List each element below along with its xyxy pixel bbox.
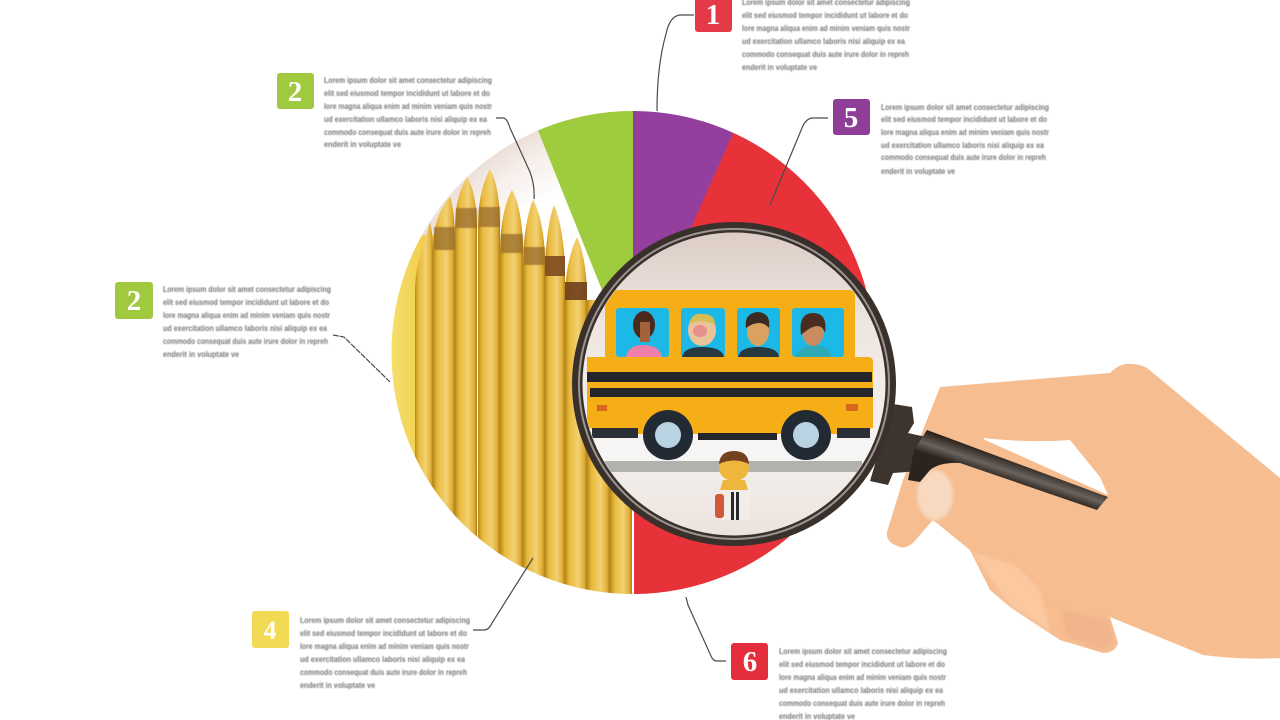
text 6: elit sed eiusmod tempor incididunt ut labore et do — [779, 659, 945, 669]
leader line: callout 4 — [473, 558, 533, 630]
text 4: elit sed eiusmod tempor incididunt ut labore et do — [300, 628, 467, 638]
leader line: callout 6 — [686, 597, 726, 661]
text 6 — [779, 646, 947, 720]
pie background — [391, 111, 633, 595]
text 5: lore magna aliqua enim ad minim veniam quis nostr — [881, 127, 1050, 137]
text 4 — [300, 615, 470, 690]
purple slice — [633, 111, 734, 258]
callout 4 — [252, 611, 470, 690]
pie chart — [391, 105, 890, 600]
text 2 left: Lorem ipsum dolor sit amet consectetur adipiscing — [163, 284, 331, 294]
text 5: Lorem ipsum dolor sit amet consectetur adipiscing — [881, 102, 1049, 112]
yellow slice — [392, 235, 441, 499]
text 4: lore magna aliqua enim ad minim veniam quis nostr — [300, 641, 470, 651]
text 5 — [881, 102, 1050, 176]
text 4: enderit in voluptate ve — [300, 680, 375, 690]
bumpers — [592, 428, 638, 438]
badge 5 — [833, 99, 870, 135]
text 4: ud exercitation ullamco laboris nisi aliquip ex ea — [300, 654, 465, 664]
gap between fingers — [983, 438, 1108, 495]
thumbnail — [917, 470, 953, 520]
badge 4: 4 — [264, 616, 276, 645]
passenger 1 — [626, 311, 662, 357]
text 2 left: elit sed eiusmod tempor incididunt ut labore et do — [163, 297, 329, 307]
lens rim — [572, 222, 896, 546]
text 5: commodo consequat duis aute irure dolor in repreh — [881, 152, 1046, 162]
badge 1 — [695, 0, 732, 32]
wheels — [643, 410, 693, 460]
passenger 2 — [682, 314, 724, 357]
lens glass — [582, 232, 886, 536]
lens scene — [580, 290, 890, 520]
road — [580, 440, 890, 461]
badge 6 — [731, 643, 768, 680]
hand — [887, 364, 1280, 659]
text 2 top: enderit in voluptate ve — [324, 139, 401, 149]
passenger 3 — [738, 312, 779, 357]
red slice — [634, 132, 867, 594]
text 2 top: lore magna aliqua enim ad minim veniam quis nostr — [324, 101, 493, 111]
text 1 — [742, 0, 911, 72]
text 4: Lorem ipsum dolor sit amet consectetur adipiscing — [300, 615, 470, 625]
text 5: ud exercitation ullamco laboris nisi aliquip ex ea — [881, 140, 1044, 150]
badge 2 top — [277, 73, 314, 109]
handle grip — [908, 430, 1108, 510]
callout 5 — [833, 99, 1050, 176]
bus body — [587, 290, 873, 434]
slice divider — [632, 510, 634, 594]
callout 2 left — [115, 282, 331, 359]
text 2 top: Lorem ipsum dolor sit amet consectetur adipiscing — [324, 75, 492, 85]
leader line: callout 1 — [657, 15, 694, 111]
badge 5: 5 — [844, 102, 858, 134]
text 2 left: commodo consequat duis aute irure dolor in repreh — [163, 336, 328, 346]
badge 2 top: 2 — [288, 76, 302, 108]
text 5: elit sed eiusmod tempor incididunt ut labore et do — [881, 114, 1047, 124]
leader line: callout 2 top — [496, 118, 534, 199]
text 1: commodo consequat duis aute irure dolor in repreh — [742, 49, 909, 59]
leader line: callout 2 left — [333, 335, 390, 382]
child with backpack — [715, 451, 750, 520]
text 2 left: ud exercitation ullamco laboris nisi aliquip ex ea — [163, 323, 327, 333]
text 6: lore magna aliqua enim ad minim veniam quis nostr — [779, 672, 947, 682]
magnifying glass handle — [870, 404, 1108, 510]
windows — [616, 308, 844, 357]
crayon bands — [434, 207, 545, 265]
text 1: ud exercitation ullamco laboris nisi aliquip ex ea — [742, 36, 905, 46]
school bus — [587, 290, 873, 460]
badge 2 left: 2 — [127, 285, 141, 317]
text 2 top: elit sed eiusmod tempor incididunt ut labore et do — [324, 88, 490, 98]
text 4: commodo consequat duis aute irure dolor in repreh — [300, 667, 467, 677]
bus lights — [597, 405, 607, 411]
text 1: enderit in voluptate ve — [742, 62, 817, 72]
leader line: callout 5 — [770, 118, 828, 205]
badge 6: 6 — [743, 646, 757, 678]
text 1: elit sed eiusmod tempor incididunt ut labore et do — [742, 10, 908, 20]
text 1: lore magna aliqua enim ad minim veniam quis nostr — [742, 23, 911, 33]
text 2 top — [324, 75, 493, 149]
text 6: ud exercitation ullamco laboris nisi aliquip ex ea — [779, 685, 943, 695]
collar — [870, 404, 926, 485]
text 6: Lorem ipsum dolor sit amet consectetur adipiscing — [779, 646, 947, 656]
callout 6 — [731, 643, 947, 720]
text 2 left: enderit in voluptate ve — [163, 349, 239, 359]
text 5: enderit in voluptate ve — [881, 166, 955, 176]
crayons — [415, 169, 632, 600]
text 2 left: lore magna aliqua enim ad minim veniam quis nostr — [163, 310, 331, 320]
text 2 top: ud exercitation ullamco laboris nisi aliquip ex ea — [324, 114, 487, 124]
badge 2 left — [115, 282, 153, 319]
callout 1 — [695, 0, 911, 72]
text 6: commodo consequat duis aute irure dolor in repreh — [779, 698, 945, 708]
bus stripes — [587, 372, 872, 382]
badge 4 — [252, 611, 289, 648]
finger shading — [972, 552, 1050, 632]
text 2 top: commodo consequat duis aute irure dolor in repreh — [324, 127, 491, 137]
green slice — [538, 111, 633, 290]
magnifying glass lens — [572, 222, 896, 546]
text 2 left — [163, 284, 331, 359]
passenger 4 — [795, 313, 832, 357]
callout 2 top — [277, 73, 493, 149]
